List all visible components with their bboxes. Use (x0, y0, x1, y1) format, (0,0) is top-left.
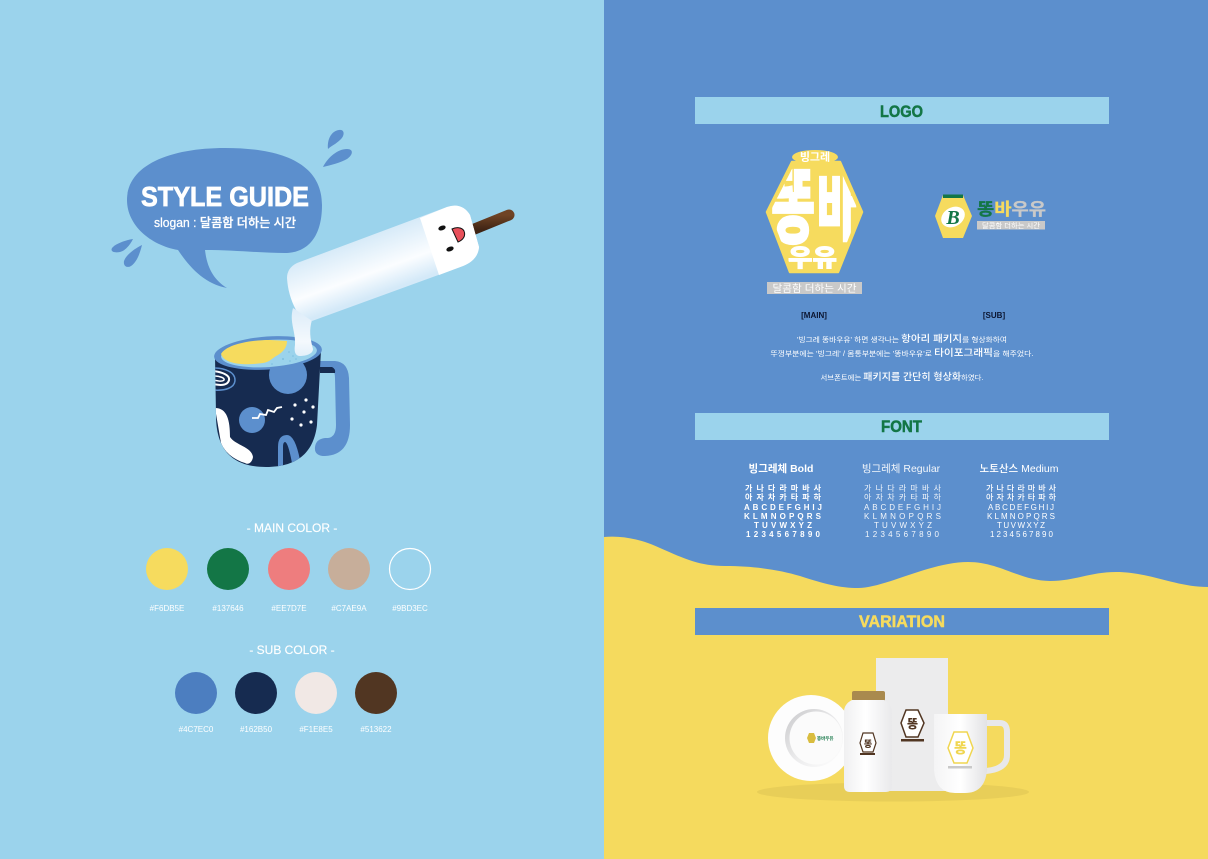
carton body (287, 206, 479, 321)
logo description: 서브폰트에는 패키지를 간단히 형상화 하였다. (820, 371, 984, 383)
font sample: bold: 가 나 다 라 마 바 사 (745, 483, 822, 493)
logotype: uyu: 우유 (788, 245, 837, 272)
font sample: bold: ABCDEFGHIJ (744, 503, 822, 512)
font sample: medium: 1234567890 (990, 530, 1054, 539)
main logo (767, 150, 862, 295)
font sample: medium: TUVWXYZ (997, 521, 1045, 530)
style guide title: STYLE GUIDE (141, 181, 309, 212)
sub logo wordmark: 똥바우유 (977, 200, 1046, 219)
main color heading: - MAIN COLOR - (247, 521, 337, 535)
font sample: medium: 노토산스 Medium (980, 463, 1059, 475)
mug body (215, 350, 321, 467)
main color codes: #EE7D7E (271, 604, 307, 613)
font sample: regular: KLMNOPQRS (864, 512, 941, 521)
speech bubble with title (127, 148, 322, 288)
logotype: ba: 바 (817, 167, 856, 250)
left panel background (0, 0, 604, 859)
main color codes: #9BD3EC (392, 604, 428, 613)
main color codes: #F6DB5E (150, 604, 184, 613)
variation product mockups (757, 658, 1029, 802)
font sample: regular: 가 나 다 라 마 바 사 (864, 483, 942, 493)
logotype: ttong: 똥 (771, 163, 815, 254)
yellow wave background (604, 537, 1208, 859)
font sample: regular: 1234567890 (865, 530, 940, 539)
font sample: bold: KLMNOPQRS (744, 512, 822, 521)
main color codes (150, 604, 428, 613)
sub color swatches (175, 672, 397, 714)
face (438, 225, 465, 252)
sub logo: 달콤함 더하는 시간 (982, 221, 1041, 230)
carton face panel (420, 206, 479, 275)
logo captions (801, 311, 1005, 320)
plate: 똥바우유 (817, 735, 834, 742)
variation section banner (695, 608, 1109, 635)
milk stream (292, 308, 313, 356)
logo description: '빙그레 똥바우유' 하면 생각나는 항아리 패키지 를 형상화하여 (797, 334, 1007, 345)
mug rim (213, 333, 323, 373)
font sample: medium: 아 자 차 카 타 파 하 (986, 492, 1057, 502)
gift box (876, 658, 948, 791)
main logo: 달콤함 더하는 시간 (772, 282, 856, 295)
logo section banner: LOGO (880, 103, 923, 121)
yellow liquid (221, 340, 287, 364)
main color codes: #137646 (212, 604, 244, 613)
variation section banner: VARIATION (859, 613, 945, 631)
sub color codes: #162B50 (240, 725, 273, 734)
icon: splash drops (112, 130, 352, 267)
font section banner (695, 413, 1109, 440)
font sample: bold: 1234567890 (746, 530, 821, 539)
font sample: bold: 아 자 차 카 타 파 하 (745, 492, 822, 502)
illustration: milk carton pouring (287, 206, 509, 356)
font sample: regular: 아 자 차 카 타 파 하 (864, 492, 942, 502)
mug patterns (213, 356, 315, 468)
font sample: regular: TUVWXYZ (874, 521, 932, 530)
font sample: regular: 빙그레체 Regular (862, 463, 941, 475)
bottle (844, 691, 892, 792)
logo captions: [SUB] (983, 311, 1005, 320)
font sample: regular (862, 463, 942, 539)
bottle: 똥 (864, 739, 872, 749)
font sample: regular: ABCDEFGHIJ (864, 503, 941, 512)
gift box: 똥 (907, 717, 918, 731)
font sample: medium: ABCDEFGHIJ (988, 503, 1054, 512)
font sample: medium: 가 나 다 라 마 바 사 (986, 483, 1057, 493)
sub color codes: #F1E8E5 (299, 725, 333, 734)
sub logo tagline (977, 221, 1045, 230)
ground shadow (757, 782, 1029, 802)
sub color codes: #513622 (360, 725, 392, 734)
sub logo (935, 194, 1046, 238)
logotype clipped to jar (771, 163, 856, 272)
font sample: bold: TUVWXYZ (754, 521, 812, 530)
jar shape (767, 162, 862, 272)
drink surface (220, 337, 318, 370)
main color codes: #C7AE9A (331, 604, 367, 613)
foam dots (271, 351, 297, 365)
white mug: 똥 (954, 740, 967, 756)
slogan: slogan : 달콤함 더하는 시간 (154, 215, 296, 230)
font sample: medium (980, 463, 1059, 539)
logo tagline (767, 282, 862, 294)
logo description: 뚜껑부분에는 '빙그레' / 몸통부분에는 '똥바우유'로 타이포그래픽 을 해주었다. (770, 348, 1034, 359)
illustration: navy mug (213, 333, 350, 468)
logo description (770, 334, 1034, 383)
logo captions: [MAIN] (801, 311, 827, 320)
font sample: bold (744, 462, 822, 539)
white mug (934, 714, 1007, 793)
font section banner: FONT (881, 418, 922, 436)
sub color heading: - SUB COLOR - (249, 643, 335, 657)
right panel background (604, 0, 1208, 859)
font sample: bold: 빙그레체 Bold (749, 462, 813, 475)
sub logo jar (935, 195, 972, 238)
logo section banner (695, 97, 1109, 124)
sub color codes: #4C7EC0 (179, 725, 214, 734)
plate (768, 695, 854, 781)
font sample: medium: KLMNOPQRS (987, 512, 1055, 521)
chocolate stick (472, 215, 509, 230)
main color swatches (146, 548, 430, 590)
mug handle (315, 361, 350, 456)
lid text: 빙그레 (800, 150, 830, 164)
sub color codes (179, 725, 392, 734)
sub logo: B (945, 207, 960, 229)
